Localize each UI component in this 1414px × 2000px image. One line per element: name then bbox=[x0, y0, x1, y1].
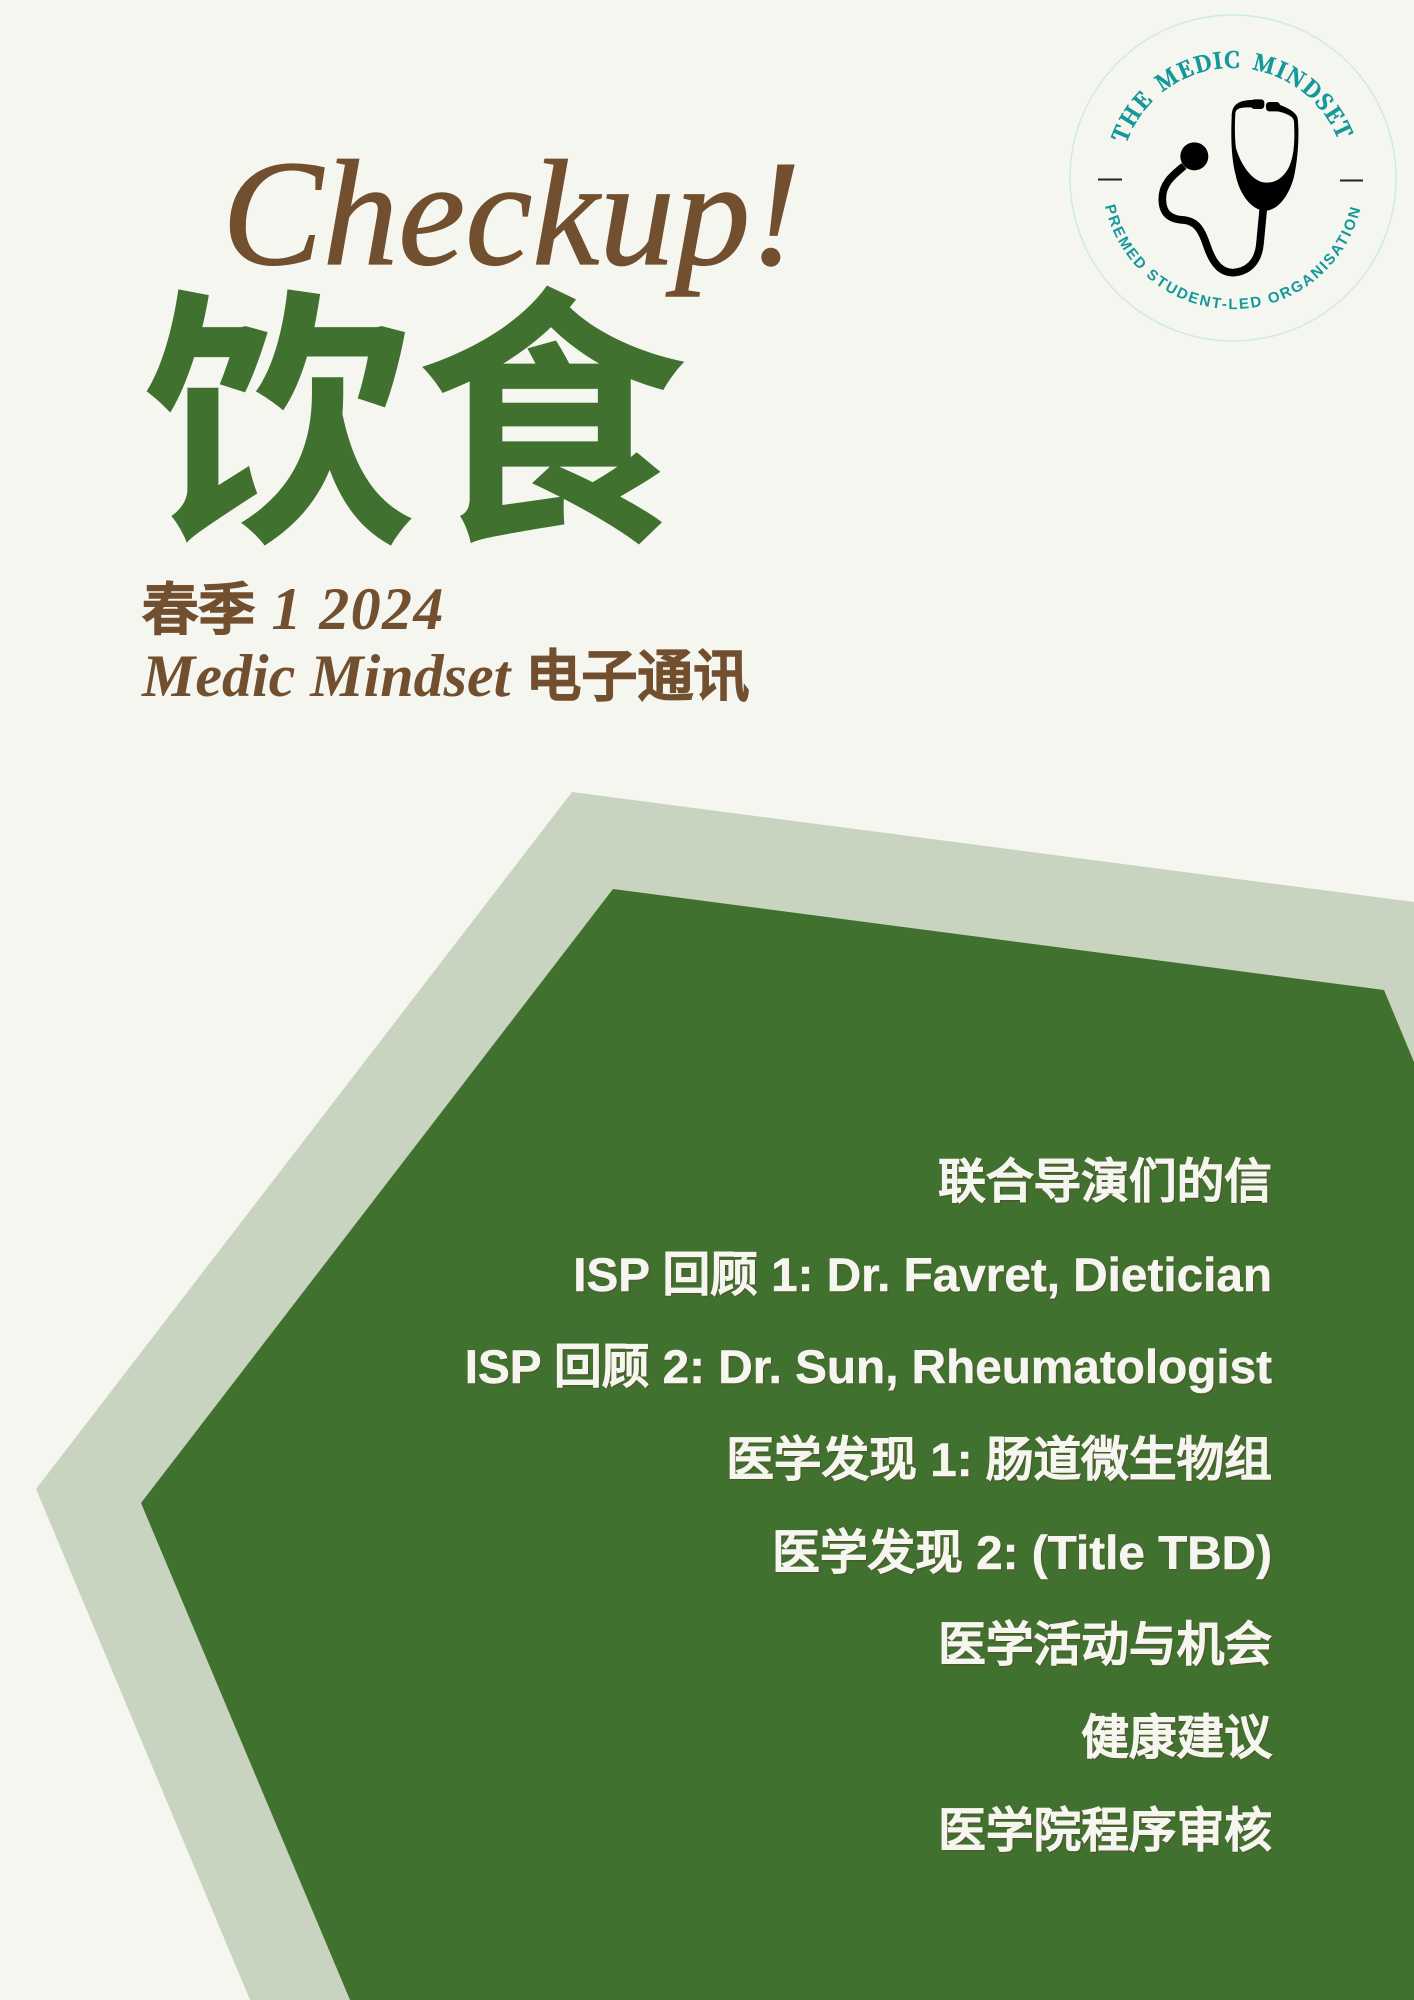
item: medical discovery 1: 医学发现 1: 肠道微生物组 bbox=[726, 1434, 1272, 1487]
item: med school review: 医学院程序审核 bbox=[938, 1805, 1272, 1858]
logo text: Premed student-led organisation: PREMED STUDENT-LED ORGANISATION bbox=[1105, 204, 1360, 310]
panel: pale green hexagon backdrop bbox=[36, 792, 1414, 2000]
title: diet in Chinese: 饮食 bbox=[142, 205, 686, 599]
logo dashes bbox=[1098, 180, 1363, 181]
panel: dark green hexagon bbox=[141, 889, 1414, 2000]
icon: stethoscope bbox=[1162, 99, 1298, 273]
subtitle: newsletter name: Medic Mindset 电子通讯 bbox=[141, 643, 749, 709]
logo: The Medic Mindset badge bbox=[1069, 14, 1397, 342]
title: Checkup!: Checkup! bbox=[222, 129, 801, 297]
item: directors' letter: 联合导演们的信 bbox=[938, 1156, 1272, 1209]
item: ISP review 2: ISP 回顾 2: Dr. Sun, Rheumatologist bbox=[465, 1341, 1272, 1394]
item: health tips: 健康建议 bbox=[1081, 1712, 1272, 1765]
item: medical discovery 2: 医学发现 2: (Title TBD) bbox=[772, 1527, 1272, 1580]
item: ISP review 1: ISP 回顾 1: Dr. Favret, Dietician bbox=[573, 1249, 1272, 1302]
item: medical events: 医学活动与机会 bbox=[938, 1619, 1272, 1672]
logo text: The Medic Mindset: THE MEDIC MINDSET bbox=[1110, 50, 1354, 141]
contents list bbox=[465, 1156, 1272, 1858]
subtitle: issue date: 春季 1 2024 bbox=[142, 576, 445, 642]
